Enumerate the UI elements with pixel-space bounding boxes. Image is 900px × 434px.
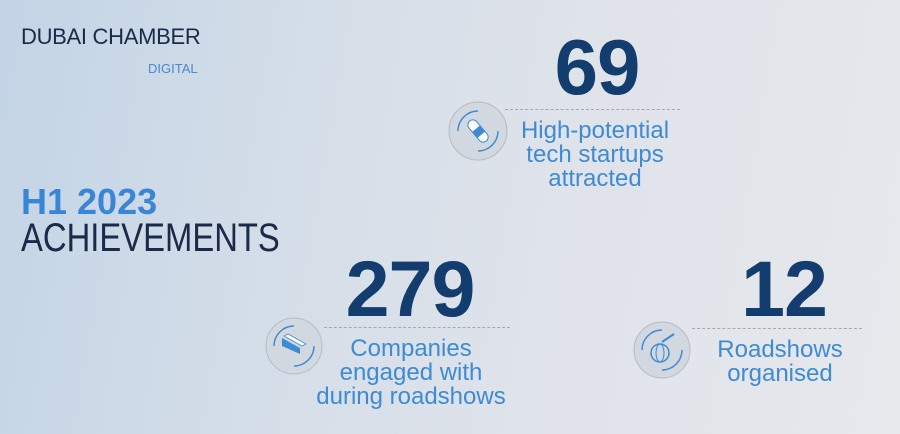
icon: globe plane — [634, 322, 690, 378]
label companies — [316, 335, 506, 410]
label companies: engaged with — [340, 359, 482, 386]
label roadshows: organised — [727, 360, 833, 387]
label startups: tech startups — [526, 141, 664, 168]
label companies: Companies — [350, 335, 472, 362]
label roadshows: Roadshows — [717, 336, 843, 363]
label companies: during roadshows — [316, 383, 506, 410]
label startups: High-potential — [521, 117, 669, 144]
stat: companies — [266, 244, 510, 410]
stat: startups — [448, 23, 680, 192]
label startups — [521, 117, 669, 192]
number 12: 12 — [741, 244, 827, 333]
number 279: 279 — [346, 244, 474, 333]
heading achievements: ACHIEVEMENTS — [21, 216, 280, 260]
heading — [21, 181, 280, 260]
stat: roadshows — [634, 244, 862, 387]
logo name: DUBAI CHAMBER — [21, 24, 200, 49]
label roadshows — [717, 336, 843, 387]
heading year: H1 2023 — [21, 181, 157, 222]
label startups: attracted — [548, 165, 642, 192]
logo subtitle: DIGITAL — [148, 61, 198, 76]
logo — [21, 24, 200, 76]
number 69: 69 — [555, 23, 639, 111]
icon: laptop — [266, 318, 322, 374]
icon: rocket — [448, 102, 508, 160]
